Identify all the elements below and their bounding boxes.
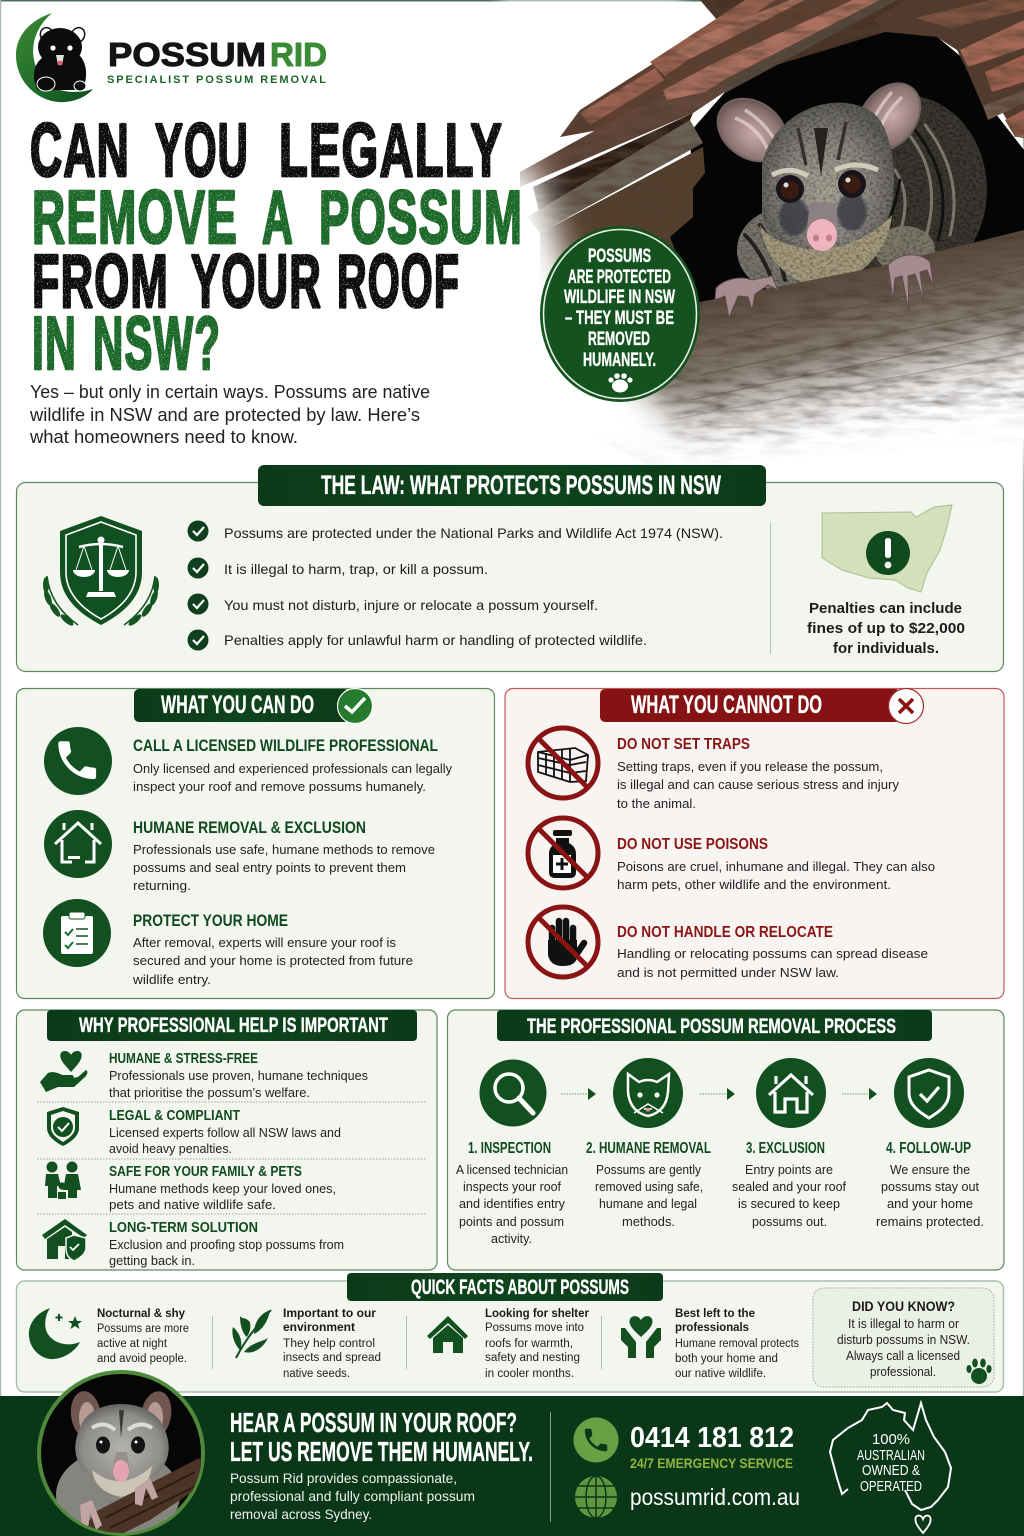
legal points list (188, 520, 723, 650)
callout badge: protected wildlife (540, 226, 700, 402)
icon: NSW map with warning (822, 505, 952, 592)
item: humane removal and exclusion (44, 810, 435, 893)
logo (16, 13, 327, 102)
item: humane removal and exclusion: returning. (133, 878, 191, 893)
step 2: humane removal: humane and legal (599, 1197, 697, 1211)
title: REMOVE (32, 175, 238, 259)
arrow (700, 1088, 735, 1100)
footer possum portrait (39, 1372, 210, 1536)
item: humane removal and exclusion: HUMANE REMOVAL & EXCLUSION (133, 819, 366, 837)
panel: why professional help is important (16, 1010, 437, 1270)
item: do not set traps (528, 728, 900, 811)
fact: nocturnal and shy: and avoid people. (97, 1353, 187, 1365)
step 3: exclusion: possums out. (752, 1215, 827, 1229)
item: call a licensed professional: inspect your roof and remove possums humanely. (133, 779, 426, 794)
item: call a licensed professional (44, 727, 452, 795)
heading: removal process (497, 1010, 932, 1041)
item: protect your home: After removal, experts will ensure your roof is (133, 935, 396, 950)
callout badge: protected wildlife: ARE PROTECTED (568, 267, 671, 288)
step 4: follow-up: and your home (887, 1197, 973, 1211)
logo wordmark: POSSUM (108, 36, 266, 73)
panel: the law (16, 465, 1004, 672)
heading: what you can do: WHAT YOU CAN DO (161, 691, 314, 719)
right paw (888, 255, 934, 312)
wood under eave (533, 113, 693, 215)
item: legal and compliant: Licensed experts follow all NSW laws and (109, 1125, 341, 1140)
item: protect your home (43, 899, 413, 987)
filler behind top timbers (700, 0, 1024, 70)
step 3: exclusion: Entry points are (745, 1163, 833, 1177)
step 1: inspection: and identifies entry (459, 1197, 566, 1211)
step 1: inspection: A licensed technician (456, 1163, 568, 1177)
fact: looking for shelter: safety and nesting (485, 1352, 580, 1364)
arrow (842, 1088, 877, 1100)
step 4: follow-up (876, 1058, 984, 1229)
back tiles (560, 0, 897, 137)
step 2: humane removal: 2. HUMANE REMOVAL (586, 1140, 711, 1157)
possum ears (706, 71, 933, 174)
title: NSW? (93, 301, 221, 385)
title (30, 108, 523, 385)
phone contact (574, 1418, 794, 1471)
step 4: follow-up: 4. FOLLOW-UP (886, 1140, 971, 1157)
title: LEGALLY (279, 108, 503, 192)
footer call to action: LET US REMOVE THEM HUMANELY. (230, 1436, 533, 1467)
step 3: exclusion: 3. EXCLUSION (746, 1140, 825, 1157)
footer call to action (230, 1407, 533, 1522)
item: safe for family and pets: SAFE FOR YOUR FAMILY & PETS (109, 1164, 302, 1180)
step 3: exclusion: is secured to keep (738, 1197, 840, 1211)
legal points list: Possums are protected under the National Parks and Wildlife Act 1974 (NSW). (224, 525, 723, 541)
item: humane and stress-free: that prioritise the possum’s welfare. (109, 1085, 310, 1100)
heading: why professional help: WHY PROFESSIONAL HELP IS IMPORTANT (79, 1014, 388, 1037)
phone contact: 0414 181 812 (630, 1422, 794, 1454)
item: do not set traps: to the animal. (617, 796, 696, 811)
item: do not set traps: Setting traps, even if you release the possum, (617, 759, 883, 774)
intro text (29, 381, 430, 447)
item: do not handle or relocate (528, 907, 928, 980)
item: do not use poisons: Poisons are cruel, inhumane and illegal. They can also (617, 859, 935, 874)
fact: best left to the professionals: Humane removal protects (675, 1338, 799, 1350)
intro text: what homeowners need to know. (29, 426, 298, 447)
phone contact: 24/7 EMERGENCY SERVICE (630, 1455, 793, 1471)
intro text: Yes – but only in certain ways. Possums are native (30, 381, 430, 402)
website contact (575, 1476, 800, 1518)
australia owned badge: OPERATED (860, 1478, 922, 1495)
step 2: humane removal: methods. (622, 1215, 675, 1229)
item: humane and stress-free: Professionals use proven, humane techniques (109, 1068, 368, 1083)
australia owned badge: AUSTRALIAN (857, 1447, 925, 1464)
item: legal and compliant: avoid heavy penalties. (109, 1141, 232, 1156)
fact: nocturnal and shy: active at night (97, 1338, 168, 1350)
left paw (715, 276, 778, 318)
fact: important to our environment: native seeds. (283, 1368, 350, 1380)
item: do not handle or relocate: Handling or relocating possums can spread disease (617, 946, 928, 961)
fact: important to our environment: They help control (283, 1338, 375, 1350)
icon: paw (608, 373, 633, 392)
fact: important to our environment (232, 1308, 381, 1380)
step 1: inspection: 1. INSPECTION (468, 1140, 551, 1157)
item: do not use poisons: harm pets, other wildlife and the environment. (617, 877, 891, 892)
fact: looking for shelter: in cooler months. (485, 1368, 574, 1380)
panel: what you can do (16, 688, 494, 998)
penalties note: Penalties can include (809, 600, 962, 617)
icon: paw (966, 1358, 992, 1384)
heading: quick facts (347, 1273, 663, 1301)
panel: professional possum removal process (448, 1010, 1004, 1270)
logo wordmark: SPECIALIST POSSUM REMOVAL (107, 74, 326, 86)
photo fade to white (470, 0, 1024, 500)
heading: quick facts: QUICK FACTS ABOUT POSSUMS (411, 1276, 629, 1299)
callout badge: protected wildlife: WILDLIFE IN NSW (564, 287, 675, 308)
footer call to action: professional and fully compliant possum (230, 1488, 475, 1504)
item: do not use poisons (528, 818, 935, 892)
item: long-term solution: getting back in. (109, 1253, 195, 1268)
fact: nocturnal and shy: Possums are more (97, 1323, 189, 1335)
item: protect your home: wildlife entry. (132, 972, 211, 987)
title: FROM (32, 239, 169, 323)
callout badge: protected wildlife: REMOVED (588, 329, 650, 350)
item: do not set traps: is illegal and can cause serious stress and injury (617, 777, 900, 792)
callout: did you know: professional. (870, 1365, 936, 1379)
callout badge: protected wildlife: POSSUMS (588, 246, 651, 267)
item: humane and stress-free: HUMANE & STRESS-FREE (109, 1051, 258, 1067)
step 1: inspection: inspects your roof (463, 1180, 562, 1194)
callout: did you know: DID YOU KNOW? (852, 1298, 955, 1314)
fact: looking for shelter: Possums move into (485, 1322, 584, 1334)
possum face markings (772, 122, 878, 251)
footer call to action: Possum Rid provides compassionate, (230, 1470, 457, 1486)
item: call a licensed professional: Only licensed and experienced professionals can legally (133, 761, 452, 776)
callout: did you know: disturb possums in NSW. (837, 1333, 970, 1347)
footer call to action: removal across Sydney. (230, 1506, 372, 1522)
australia owned badge: 100% (872, 1431, 910, 1448)
penalties note: fines of up to $22,000 (807, 620, 965, 637)
footer call to action: HEAR A POSSUM IN YOUR ROOF? (230, 1407, 517, 1438)
hero photo: possum in damaged roof (470, 0, 1024, 500)
title: YOUR (191, 239, 322, 323)
fact: important to our environment: Important to our (283, 1308, 377, 1320)
item: safe for family and pets: Humane methods keep your loved ones, (109, 1181, 336, 1196)
item: safe for family and pets (45, 1162, 336, 1212)
step 2: humane removal (586, 1058, 711, 1229)
item: protect your home: secured and your home is protected from future (133, 953, 413, 968)
footer band (0, 1372, 1024, 1536)
logo possum mascot (34, 25, 87, 91)
item: legal and compliant (47, 1107, 341, 1156)
heading: the law (258, 465, 766, 506)
step 4: follow-up: We ensure the (890, 1163, 970, 1177)
fact: best left to the professionals: Best left to the (675, 1308, 755, 1320)
legal points list: It is illegal to harm, trap, or kill a possum. (224, 561, 488, 577)
heading: why professional help (47, 1010, 417, 1041)
item: do not set traps: DO NOT SET TRAPS (617, 736, 750, 753)
logo crescent (16, 13, 93, 102)
item: protect your home: PROTECT YOUR HOME (133, 912, 288, 930)
item: humane removal and exclusion: possums and seal entry points to prevent them (133, 860, 406, 875)
fact: looking for shelter (427, 1308, 590, 1380)
intro text: wildlife in NSW and are protected by law. Here’s (29, 404, 420, 425)
arrow (561, 1088, 596, 1100)
callout: did you know: Always call a licensed (846, 1349, 960, 1363)
title: YOU (155, 108, 249, 192)
item: do not use poisons: DO NOT USE POISONS (617, 836, 768, 853)
item: do not handle or relocate: DO NOT HANDLE OR RELOCATE (617, 924, 833, 941)
top right tiles (873, 0, 1024, 138)
fact: looking for shelter: roofs for warmth, (485, 1338, 573, 1350)
fact: best left to the professionals: professionals (675, 1322, 749, 1334)
fact: looking for shelter: Looking for shelter (485, 1308, 590, 1320)
title: IN (32, 301, 77, 385)
possum body (737, 95, 987, 292)
australia owned badge (830, 1403, 951, 1533)
step 4: follow-up: possums stay out (881, 1180, 980, 1194)
item: call a licensed professional: CALL A LICENSED WILDLIFE PROFESSIONAL (133, 737, 438, 755)
item: humane and stress-free (40, 1051, 368, 1100)
roof timbers (520, 0, 1024, 310)
item: long-term solution (42, 1219, 344, 1268)
fact: best left to the professionals (621, 1308, 799, 1380)
fact: best left to the professionals: our native wildlife. (675, 1368, 766, 1380)
dark roof cavity (668, 25, 1024, 310)
penalties note: for individuals. (833, 640, 939, 657)
step 1: inspection: activity. (491, 1232, 532, 1246)
left wall (527, 120, 703, 233)
title: POSSUM (319, 175, 523, 259)
panel: quick facts about possums (16, 1273, 1004, 1392)
penalties note (807, 600, 965, 657)
website contact: possumrid.com.au (630, 1484, 800, 1510)
logo wordmark (107, 36, 327, 86)
legal points list: You must not disturb, injure or relocate a possum yourself. (224, 597, 598, 613)
item: legal and compliant: LEGAL & COMPLIANT (109, 1108, 240, 1124)
item: long-term solution: Exclusion and proofing stop possums from (109, 1237, 344, 1252)
australia owned badge: OWNED & (862, 1462, 920, 1479)
fact: best left to the professionals: both your home and (675, 1353, 778, 1365)
heading: the law: THE LAW: WHAT PROTECTS POSSUMS IN NSW (321, 470, 721, 500)
title: A (262, 175, 294, 259)
step 4: follow-up: remains protected. (876, 1215, 984, 1229)
fact: nocturnal and shy: Nocturnal & shy (97, 1308, 186, 1320)
heading: what you cannot do: WHAT YOU CANNOT DO (631, 691, 822, 719)
panel: what you cannot do (505, 688, 1004, 998)
main plank (520, 0, 897, 187)
heading: what you can do (134, 688, 372, 724)
callout: did you know (813, 1288, 994, 1387)
step 1: inspection (456, 1060, 568, 1246)
step 1: inspection: points and possum (459, 1215, 564, 1229)
callout: did you know: It is illegal to harm or (848, 1317, 959, 1331)
callout badge: protected wildlife: – THEY MUST BE (565, 308, 674, 329)
legal points list: Penalties apply for unlawful harm or handling of protected wildlife. (224, 632, 647, 648)
item: long-term solution: LONG-TERM SOLUTION (109, 1220, 258, 1236)
item: safe for family and pets: pets and native wildlife safe. (109, 1197, 276, 1212)
icon: shield with scales and laurel (42, 516, 160, 627)
possum head (760, 103, 894, 286)
fact: important to our environment: insects and spread (283, 1352, 381, 1364)
item: do not handle or relocate: and is not permitted under NSW law. (617, 965, 839, 980)
timber beam with paws (540, 230, 1024, 470)
fact: important to our environment: environment (283, 1322, 355, 1334)
possum fur stripes (745, 125, 954, 280)
title: CAN (30, 108, 130, 192)
step 2: humane removal: Possums are gently (596, 1163, 702, 1177)
callout badge: protected wildlife: HUMANELY. (583, 350, 656, 371)
step 3: exclusion: sealed and your roof (732, 1180, 847, 1194)
logo wordmark: RID (270, 36, 327, 73)
step 2: humane removal: removed using safe, (595, 1180, 703, 1194)
step 3: exclusion (732, 1058, 847, 1229)
title: ROOF (337, 239, 460, 323)
item: humane removal and exclusion: Professionals use safe, humane methods to remove (133, 842, 435, 857)
fact: nocturnal and shy (29, 1308, 189, 1365)
